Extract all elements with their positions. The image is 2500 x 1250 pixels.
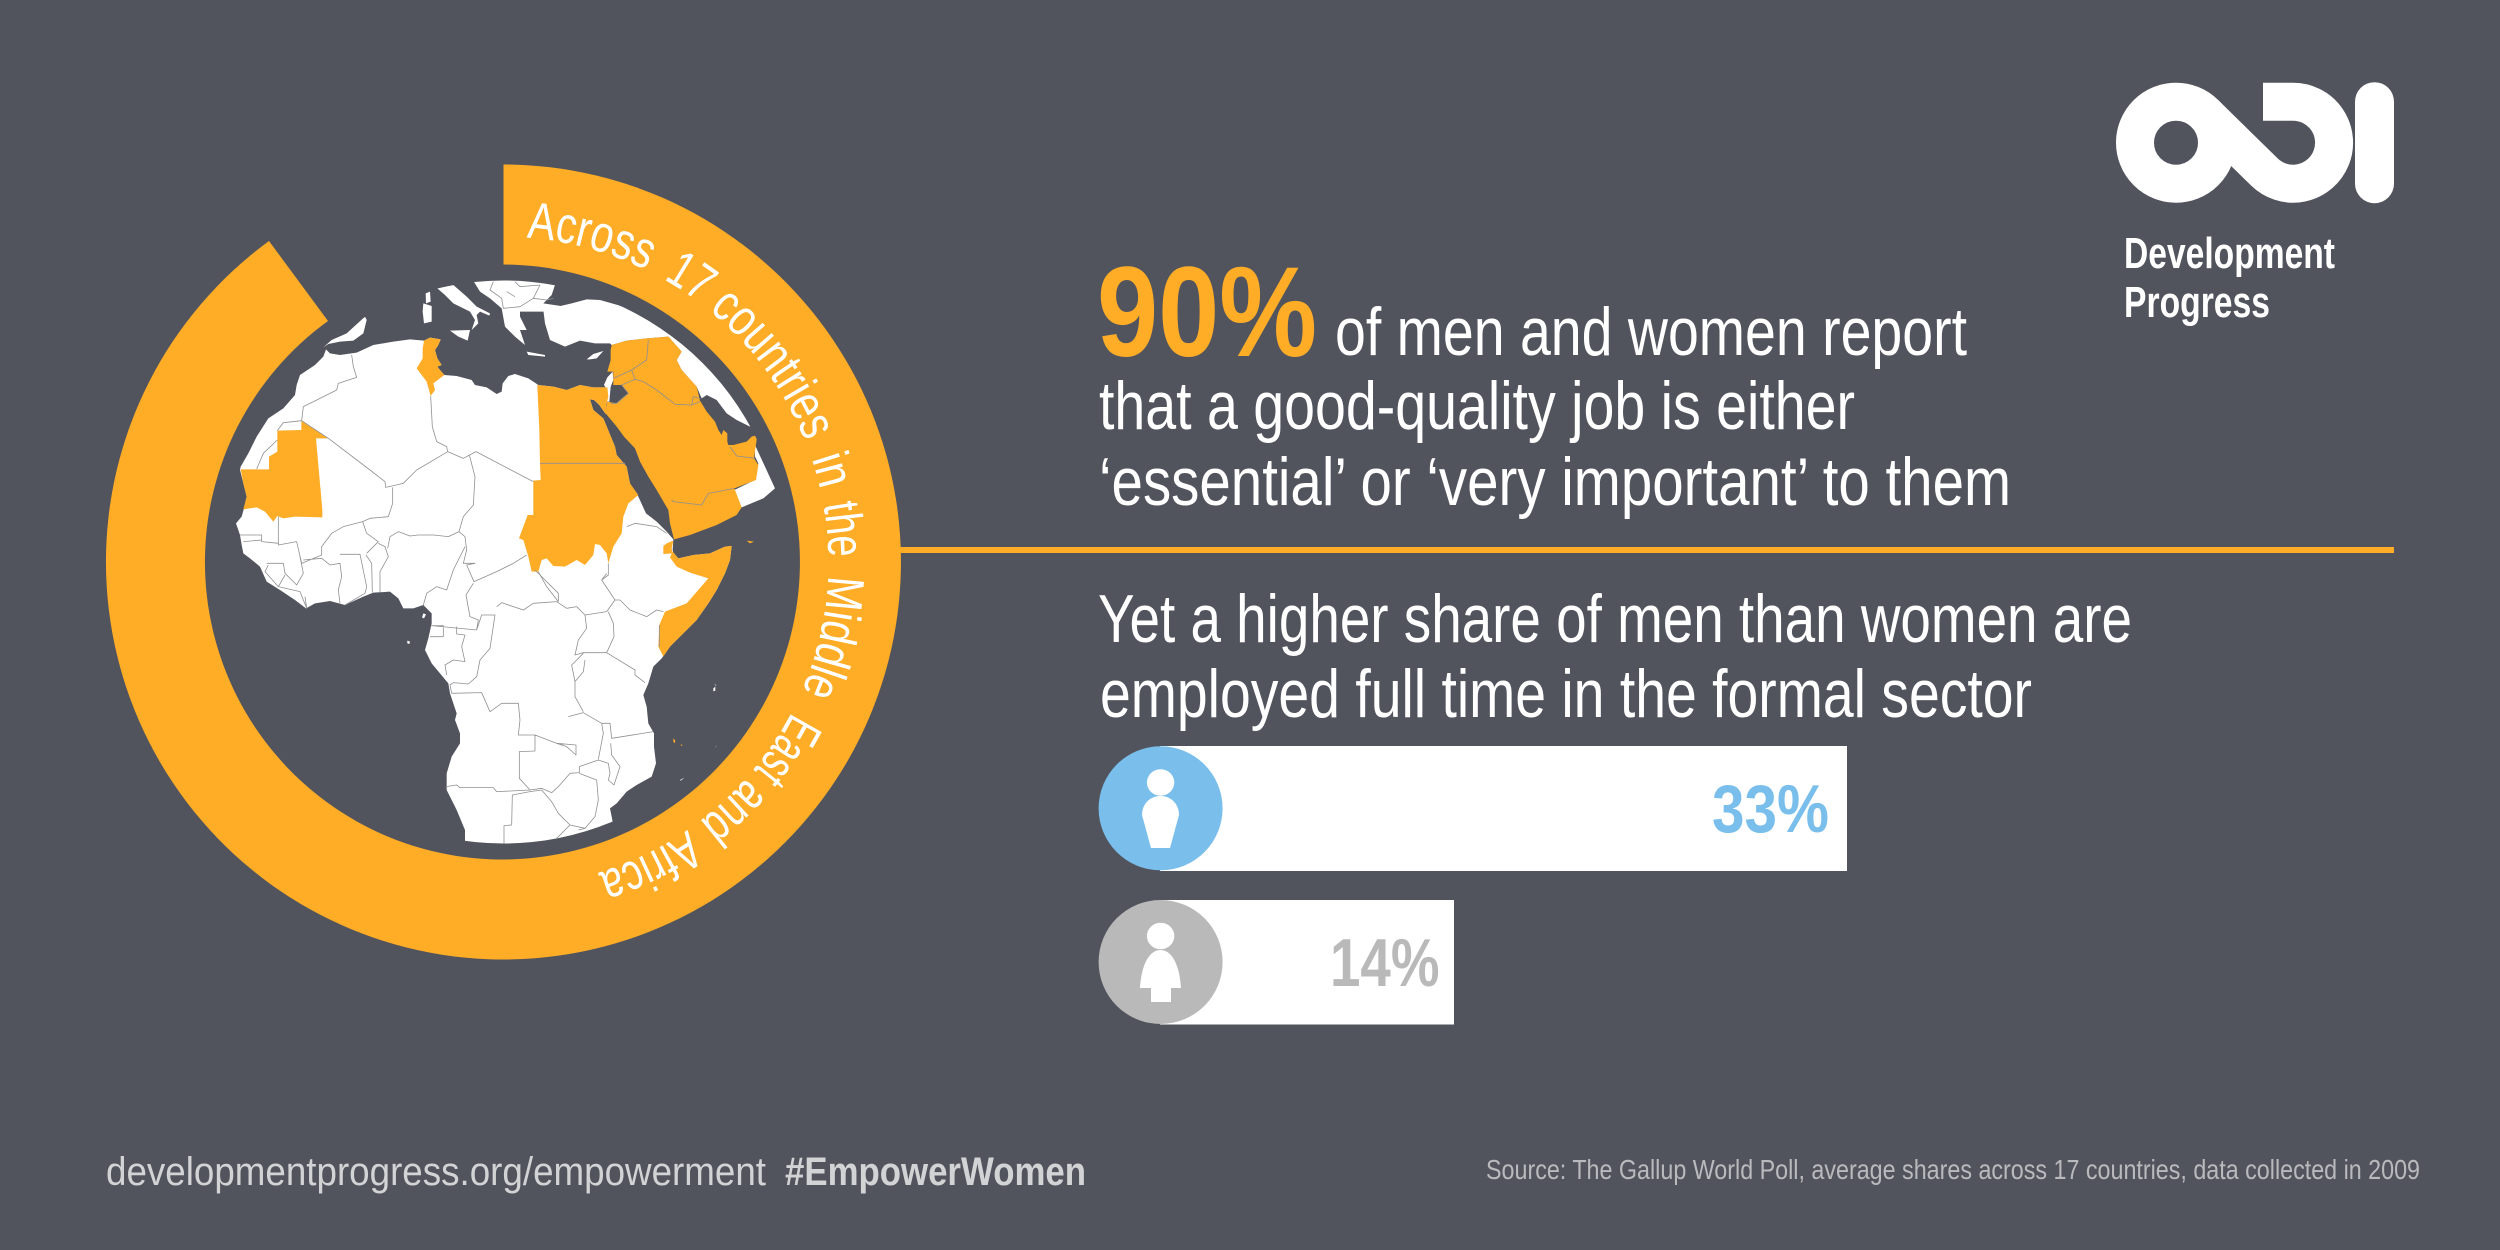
headline: 90% statement: 90% — [1097, 241, 1317, 384]
bar: men 33%: 33% — [1712, 771, 1829, 847]
orange ring — [106, 164, 901, 959]
country borders — [240, 282, 755, 843]
logo label: Development Progress: Progress — [2124, 278, 2270, 327]
headline: 90% statement — [1097, 241, 2011, 520]
subheading: employment gap: Yet a higher share of men than women are — [1098, 581, 2132, 657]
subheading: employment gap — [1098, 581, 2132, 732]
headline: 90% statement: that a good-quality job is either — [1099, 368, 1855, 444]
logo label: Development Progress: Development — [2124, 229, 2335, 278]
bar: women 14%: 14% — [1330, 925, 1440, 1001]
logo label: Development Progress — [2124, 229, 2335, 327]
orange connector line — [898, 547, 2394, 553]
subheading: employment gap: employed full time in the formal sector — [1100, 656, 2032, 732]
footer link and hashtag: #EmpowerWomen — [785, 1150, 1086, 1194]
bar: men 33% — [1099, 746, 1847, 871]
curved ring caption: Across 17 countries in the Middle East and Africa — [526, 203, 864, 897]
icon: woman — [1140, 923, 1181, 1002]
headline: 90% statement: of men and women report — [1335, 294, 1967, 370]
small islands — [407, 613, 717, 781]
ODI logo — [2135, 102, 2374, 184]
bar: women 14% — [1099, 900, 1454, 1024]
icon: man — [1142, 769, 1179, 848]
land: Europe and Turkey — [323, 270, 800, 507]
highlighted countries — [241, 337, 758, 657]
headline: 90% statement: ‘essential’ or ‘very important’ to them — [1099, 444, 2011, 520]
map: Africa and the Middle East — [236, 270, 800, 853]
footer link and hashtag: developmentprogress.org/empowerment — [106, 1150, 766, 1194]
land: Africa — [236, 338, 732, 853]
